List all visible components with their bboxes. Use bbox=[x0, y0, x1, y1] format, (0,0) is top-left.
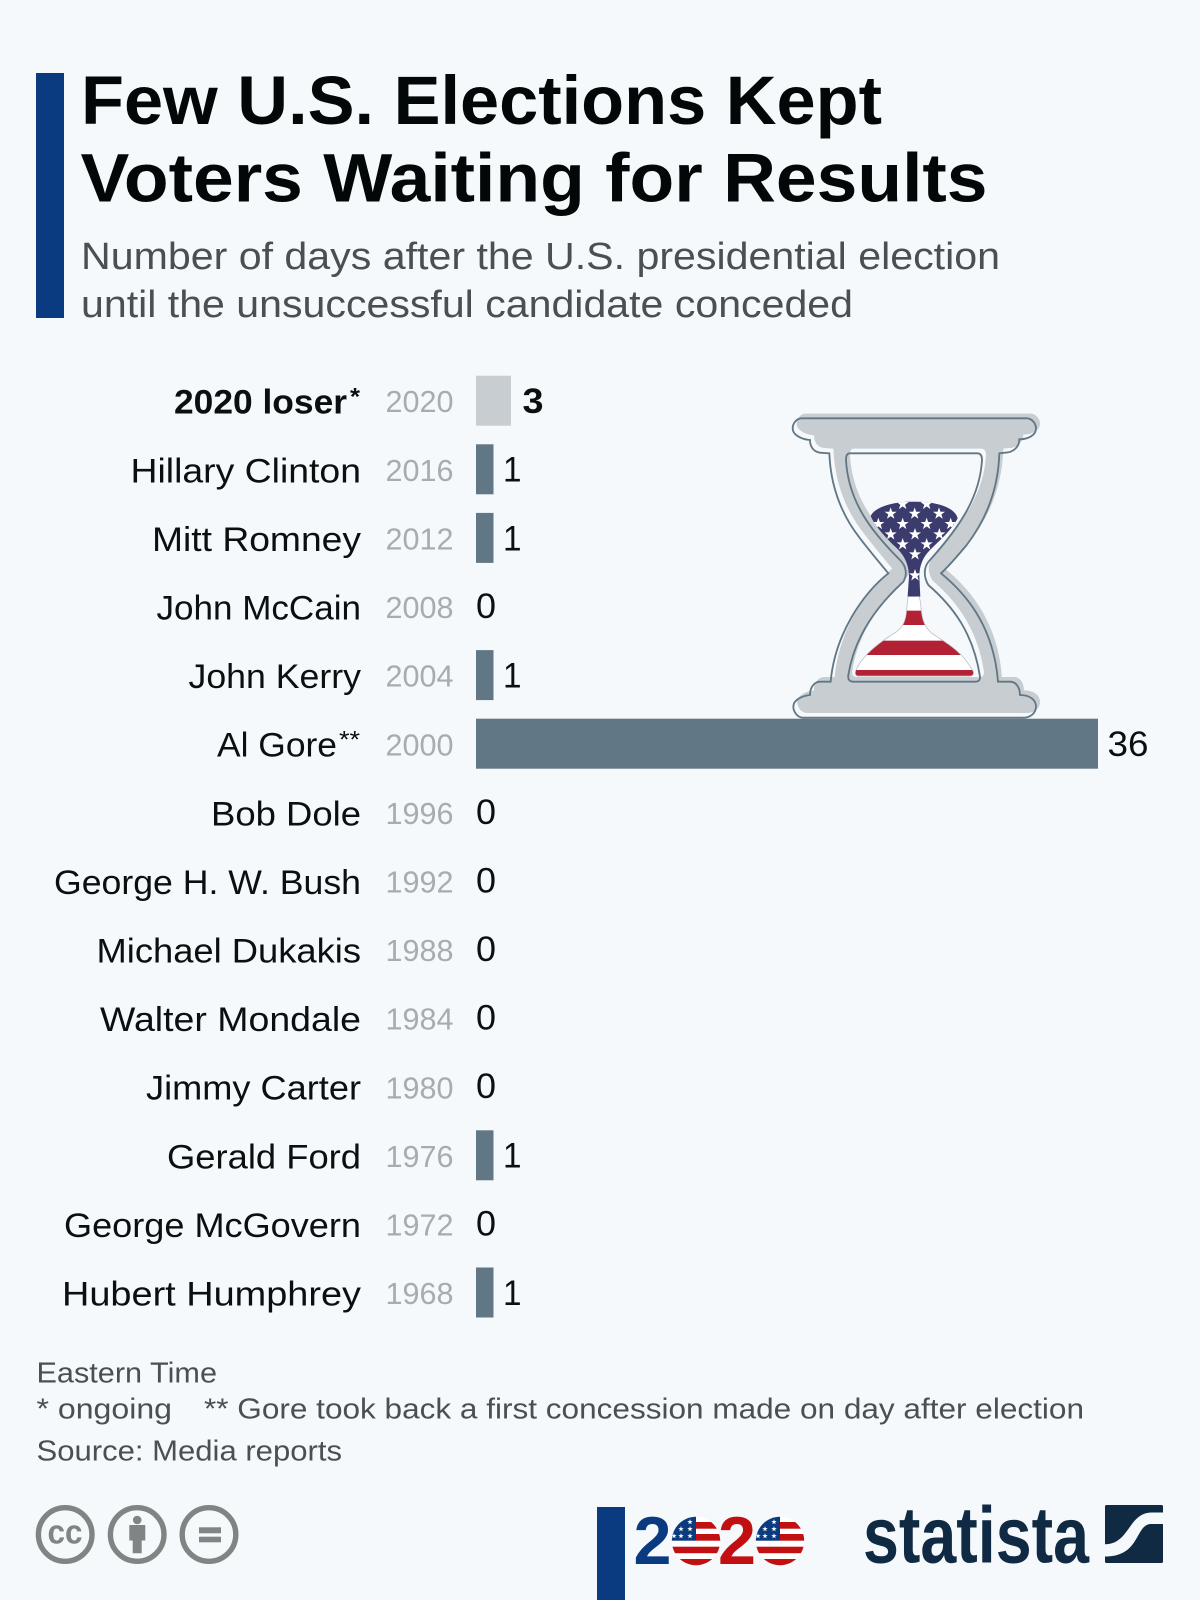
row: Hubert Humphrey: 1 bbox=[503, 1274, 522, 1313]
row: John McCain bbox=[156, 587, 496, 628]
icon: hourglass with american flag sand bbox=[793, 414, 1040, 718]
bar chart bbox=[54, 376, 1148, 1318]
subtitle: until the unsuccessful candidate conceded bbox=[81, 284, 853, 326]
row: Jimmy Carter bbox=[146, 1067, 496, 1108]
footnotes and source: Source: Media reports bbox=[36, 1436, 342, 1468]
icon: creative commons licence bbox=[38, 1508, 236, 1561]
row: Hubert Humphrey: Hubert Humphrey bbox=[62, 1276, 362, 1314]
row: John Kerry: John Kerry bbox=[188, 658, 362, 696]
row: John Kerry: 2004 bbox=[386, 659, 454, 694]
row: Al Gore: 2000 bbox=[386, 727, 454, 762]
row: Michael Dukakis: 1988 bbox=[386, 933, 454, 968]
row: 2020 loser: 2020 bbox=[386, 384, 454, 419]
row: John McCain: 0 bbox=[476, 587, 496, 626]
row: Michael Dukakis: 0 bbox=[476, 930, 496, 969]
row: Michael Dukakis bbox=[96, 930, 496, 970]
logo: 2020 election: 2 bbox=[718, 1503, 756, 1579]
row: Hillary Clinton: 2016 bbox=[386, 453, 454, 488]
row: Al Gore bbox=[217, 719, 1148, 769]
accent bar: 2020 logo bbox=[597, 1507, 625, 1600]
row: Jimmy Carter: 1980 bbox=[386, 1070, 454, 1105]
logo: 2020 election bbox=[636, 1516, 804, 1566]
row: Gerald Ford: 1976 bbox=[386, 1139, 454, 1174]
logo: statista wordmark: statista bbox=[863, 1490, 1089, 1580]
row: 2020 loser: * bbox=[350, 384, 361, 410]
title accent bar bbox=[36, 73, 64, 318]
row: 2020 loser: 3 bbox=[522, 382, 544, 421]
row: John McCain: 2008 bbox=[386, 590, 454, 625]
row: George H. W. Bush: George H. W. Bush bbox=[54, 864, 361, 902]
footnotes and source: ** Gore took back a first concession made on day after election bbox=[204, 1394, 1084, 1426]
row: Walter Mondale: 0 bbox=[476, 999, 496, 1038]
icon: attribution bbox=[110, 1508, 164, 1561]
row: Hillary Clinton bbox=[130, 444, 522, 494]
row: John McCain: John McCain bbox=[156, 590, 361, 628]
title bbox=[80, 62, 988, 216]
row: Mitt Romney: 1 bbox=[503, 519, 522, 558]
icon: no derivatives bbox=[182, 1508, 236, 1561]
icon: cc bbox=[38, 1508, 92, 1561]
row: John Kerry: 1 bbox=[503, 656, 522, 696]
row: George McGovern: 0 bbox=[476, 1204, 496, 1243]
row: Hillary Clinton: Hillary Clinton bbox=[130, 452, 361, 490]
row: Mitt Romney: 2012 bbox=[386, 522, 454, 556]
row: Walter Mondale: Walter Mondale bbox=[100, 1001, 361, 1039]
row: Mitt Romney: Mitt Romney bbox=[152, 521, 362, 559]
row: John Kerry bbox=[188, 650, 522, 700]
row: Jimmy Carter: Jimmy Carter bbox=[146, 1070, 361, 1108]
row: Bob Dole bbox=[211, 793, 496, 833]
row: Gerald Ford bbox=[167, 1130, 522, 1180]
row: Hillary Clinton: 1 bbox=[503, 451, 522, 490]
row: Walter Mondale: 1984 bbox=[386, 1002, 454, 1037]
title: Voters Waiting for Results bbox=[80, 140, 988, 216]
row: Bob Dole: Bob Dole bbox=[211, 795, 361, 833]
row: Jimmy Carter: 0 bbox=[476, 1067, 496, 1106]
row: 2020 loser: 2020 loser bbox=[174, 384, 347, 422]
row: Michael Dukakis: Michael Dukakis bbox=[96, 932, 361, 970]
row: Gerald Ford: 1 bbox=[503, 1137, 522, 1176]
row: George H. W. Bush: 1992 bbox=[386, 864, 454, 900]
row: George McGovern: George McGovern bbox=[64, 1207, 361, 1245]
row: Hubert Humphrey: 1968 bbox=[386, 1276, 454, 1311]
icon: cc: cc bbox=[48, 1514, 82, 1552]
title: Few U.S. Elections Kept bbox=[81, 62, 882, 139]
row: Al Gore: 36 bbox=[1108, 725, 1148, 764]
row: George McGovern: 1972 bbox=[386, 1208, 454, 1242]
row: George H. W. Bush bbox=[54, 861, 496, 902]
row: Gerald Ford: Gerald Ford bbox=[167, 1138, 361, 1176]
row: Mitt Romney bbox=[152, 513, 522, 563]
footnotes and source: * ongoing bbox=[36, 1394, 172, 1426]
row: George H. W. Bush: 0 bbox=[476, 861, 496, 900]
row: Al Gore: Al Gore bbox=[217, 727, 337, 765]
row: Bob Dole: 1996 bbox=[386, 796, 454, 831]
row: Al Gore: ** bbox=[339, 726, 360, 754]
footnotes and source bbox=[36, 1358, 1084, 1468]
icon: flag circle bbox=[756, 1516, 804, 1566]
row: Bob Dole: 0 bbox=[476, 793, 496, 832]
subtitle bbox=[81, 236, 1000, 326]
subtitle: Number of days after the U.S. presidential election bbox=[81, 236, 1000, 278]
icon: flag circle bbox=[672, 1516, 720, 1566]
row: Walter Mondale bbox=[100, 999, 496, 1039]
row: 2020 loser bbox=[174, 376, 544, 426]
logo: 2020 election: 2 bbox=[634, 1503, 672, 1579]
row: Hubert Humphrey bbox=[62, 1268, 522, 1318]
logo: statista mark bbox=[1105, 1505, 1164, 1563]
footnotes and source: Eastern Time bbox=[36, 1358, 217, 1390]
row: George McGovern bbox=[64, 1204, 496, 1245]
